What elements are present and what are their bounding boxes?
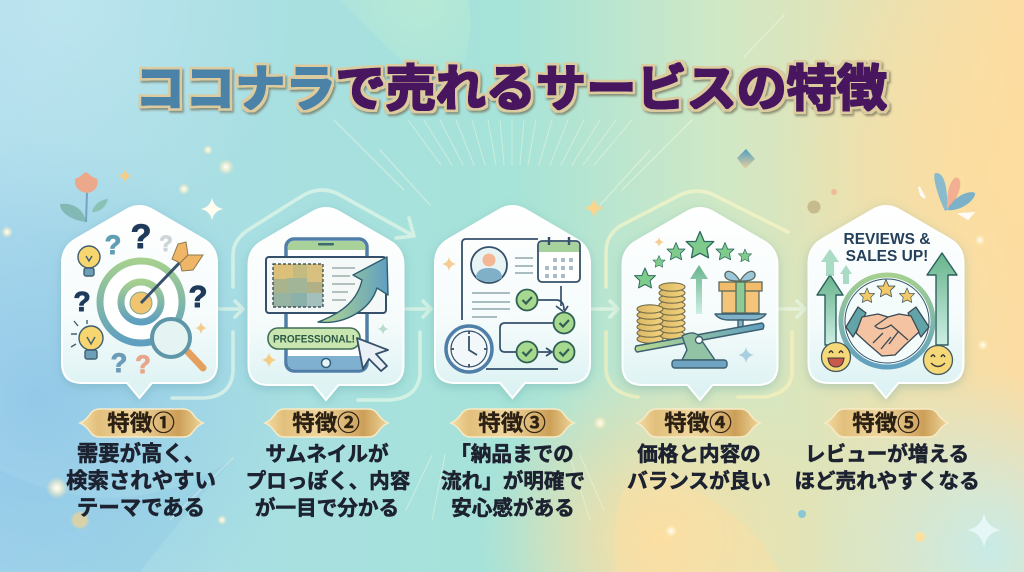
text 2: が一目で分かる bbox=[255, 496, 399, 520]
icon: question marks: ? bbox=[73, 286, 91, 317]
text 5: レビューが増える bbox=[805, 442, 969, 466]
badge 2: 特徴② bbox=[292, 411, 360, 436]
text 2: プロっぽく、内容 bbox=[246, 469, 411, 493]
panel: feature 5 bbox=[794, 206, 980, 493]
text 1: テーマである bbox=[77, 496, 205, 520]
badge 3: 特徴③ bbox=[478, 411, 546, 436]
text 2: サムネイルが bbox=[265, 442, 389, 466]
badge 1: 特徴① bbox=[107, 411, 175, 436]
icon: cursor bbox=[357, 338, 388, 371]
card 4 bbox=[622, 208, 778, 400]
icon: sparkles bbox=[262, 324, 388, 368]
icon: clock bbox=[446, 326, 492, 372]
icon: handshake bbox=[846, 307, 929, 356]
text 4: 価格と内容の bbox=[637, 443, 761, 466]
icon: listing panel with mosaic thumbnail bbox=[266, 257, 386, 313]
text 1: 需要が高く、 bbox=[77, 441, 205, 466]
decorative sparkles and dots bbox=[1, 145, 1001, 547]
icon: question marks: ? bbox=[189, 279, 207, 314]
icon: magnifier bbox=[152, 319, 203, 368]
panel: feature 2 bbox=[246, 208, 411, 520]
badge 5: 特徴⑤ bbox=[852, 411, 920, 436]
icon: document outline bbox=[462, 239, 558, 369]
card 5 bbox=[808, 206, 964, 398]
card 2 bbox=[248, 208, 404, 400]
label: professional: PROFESSIONAL! bbox=[273, 334, 355, 346]
card 1 bbox=[62, 206, 217, 398]
icon: up arrow bbox=[690, 265, 708, 314]
panel: feature 3 bbox=[435, 206, 590, 520]
icon: growth arrow bbox=[318, 257, 388, 322]
text 3: 安心感がある bbox=[451, 496, 575, 520]
icon: smile faces bbox=[822, 342, 952, 374]
text lines bbox=[472, 258, 533, 317]
icon: question marks: ? bbox=[105, 230, 121, 260]
icon: light bulbs bbox=[71, 246, 103, 359]
icon: balance scale bbox=[635, 314, 766, 368]
badge 3 bbox=[451, 409, 574, 437]
heading: reviews and sales up: REVIEWS & bbox=[844, 231, 930, 248]
icon: target with arrow bbox=[100, 242, 203, 343]
text 3: 「納品までの bbox=[450, 443, 574, 466]
panel: feature 1 bbox=[62, 206, 217, 520]
flow connectors bbox=[500, 286, 568, 356]
icon: calendar bbox=[538, 237, 580, 282]
icon: coins bbox=[637, 283, 685, 343]
icon: sparkle bbox=[442, 257, 456, 271]
text 4: バランスが良い bbox=[627, 469, 771, 493]
heading: reviews and sales up: SALES UP! bbox=[846, 248, 928, 265]
text 1: 検索されやすい bbox=[66, 469, 216, 493]
icon: stars bbox=[635, 232, 752, 288]
text 5: ほど売れやすくなる bbox=[794, 470, 980, 493]
label: professional bbox=[268, 328, 360, 349]
decorative rays and streaks bbox=[170, 15, 784, 520]
badge 4 bbox=[637, 409, 760, 437]
icon: question marks: ? bbox=[131, 218, 151, 256]
icon: avatar bbox=[471, 247, 507, 283]
icon: question marks: ? bbox=[159, 231, 173, 256]
badge 4: 特徴④ bbox=[664, 411, 732, 436]
text 3: 流れ」が明確で bbox=[441, 469, 585, 493]
panel: feature 4 bbox=[622, 208, 778, 493]
icon: flower left bbox=[60, 172, 108, 222]
icon: sparkles bbox=[654, 237, 754, 363]
title: ココナラで売れるサービスの特徴 bbox=[135, 61, 887, 117]
badge 1 bbox=[80, 409, 203, 437]
icon: gift bbox=[719, 271, 762, 313]
icon: question marks: ? bbox=[135, 351, 151, 379]
flow arrows connecting the cards bbox=[172, 190, 805, 400]
badge 5 bbox=[825, 409, 948, 437]
icon: sparkles bbox=[195, 322, 207, 334]
icon: rising arrows bbox=[817, 249, 957, 345]
icon: question marks: ? bbox=[111, 348, 127, 378]
icon: check circles bbox=[516, 290, 574, 362]
icon: question marks bbox=[73, 218, 207, 379]
icon: ring with stars bbox=[841, 275, 933, 367]
card 3 bbox=[435, 206, 590, 398]
icon: butterfly right bbox=[919, 173, 975, 219]
icon: tablet bbox=[286, 239, 367, 371]
badge 2 bbox=[265, 409, 388, 437]
